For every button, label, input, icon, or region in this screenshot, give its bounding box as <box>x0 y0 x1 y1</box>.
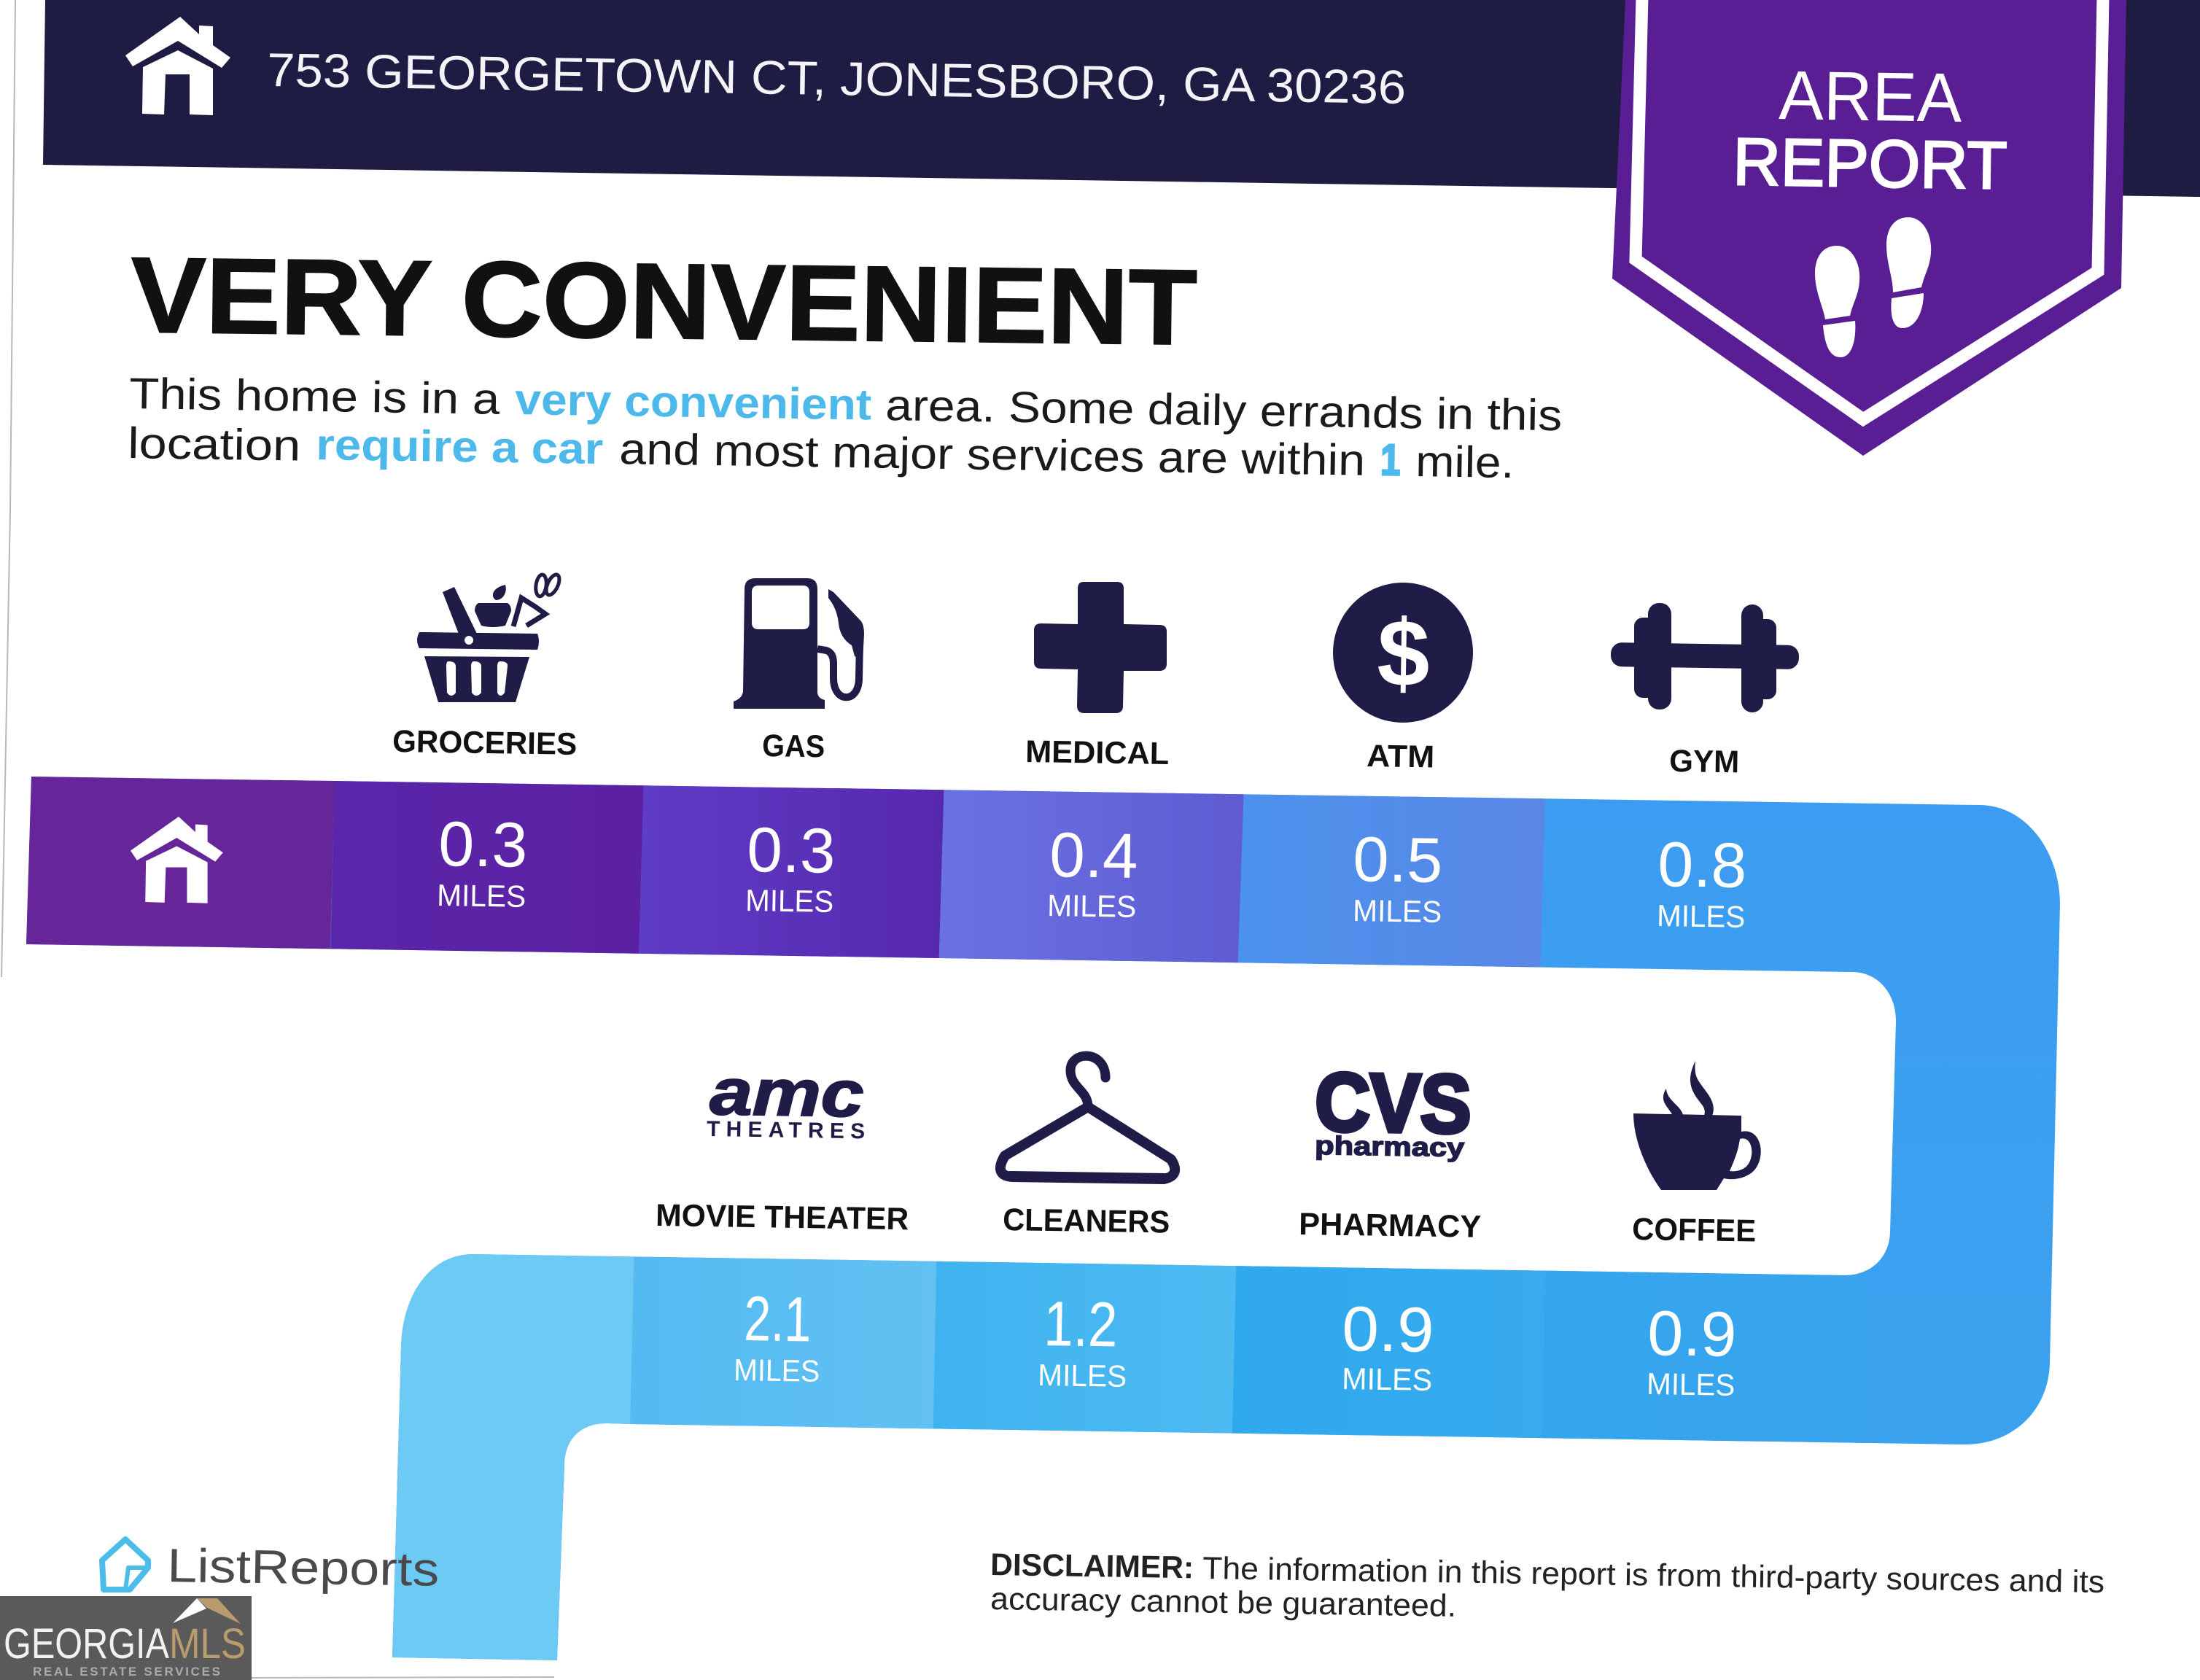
logo: georgia mls: GEORGIA <box>4 1620 169 1668</box>
intro paragraph: location <box>128 419 301 470</box>
logo: georgia mls <box>0 1596 252 1680</box>
intro paragraph: This home is in a <box>129 369 500 424</box>
logo: cvs pharmacy: pharmacy <box>1315 1130 1464 1162</box>
icon: footprints <box>1815 217 1931 357</box>
disclaimer: The information in this report is from third-party sources and its <box>1202 1551 2104 1600</box>
label: atm: ATM <box>1367 739 1435 774</box>
distance ribbon path <box>26 777 2060 1660</box>
disclaimer <box>990 1547 2104 1624</box>
intro paragraph: very convenient <box>515 375 872 429</box>
ribbon heading <box>1733 57 2007 203</box>
distance: cleaners 1.2 miles: 1.2 <box>1043 1288 1118 1361</box>
distance: coffee 0.9 miles <box>1647 1298 1737 1402</box>
distance: gym 0.8 miles <box>1657 829 1747 934</box>
intro paragraph: 1 <box>1380 435 1401 484</box>
intro paragraph: and most major services are within <box>619 424 1366 485</box>
logo: georgia mls: REAL ESTATE SERVICES <box>33 1665 220 1679</box>
icon: atm coin: $ <box>1377 599 1431 707</box>
icon: clothes hanger <box>1000 1056 1175 1179</box>
intro paragraph: require a car <box>316 420 604 473</box>
distance: medical 0.4 miles <box>1047 820 1138 924</box>
distance: movie theater 2.1 miles: MILES <box>734 1353 820 1388</box>
label: pharmacy: PHARMACY <box>1299 1207 1482 1245</box>
distance: coffee 0.9 miles: 0.9 <box>1647 1298 1737 1370</box>
label: groceries: GROCERIES <box>392 724 578 762</box>
distance: gym 0.8 miles: MILES <box>1657 898 1746 934</box>
distance: pharmacy 0.9 miles: MILES <box>1342 1361 1433 1397</box>
ribbon heading: REPORT <box>1733 125 2007 203</box>
ribbon heading: AREA <box>1779 57 1963 137</box>
logo: listreports: ListReports <box>167 1539 440 1596</box>
label: movie theater: MOVIE THEATER <box>656 1198 909 1237</box>
label: coffee: COFFEE <box>1632 1212 1757 1249</box>
distance: groceries 0.3 miles: MILES <box>437 878 526 914</box>
disclaimer: DISCLAIMER: <box>990 1547 1194 1585</box>
intro paragraph <box>128 369 1563 487</box>
distance: gas 0.3 miles: 0.3 <box>747 814 836 887</box>
distance: medical 0.4 miles: 0.4 <box>1049 820 1138 892</box>
distance: pharmacy 0.9 miles: 0.9 <box>1342 1294 1434 1366</box>
distance: cleaners 1.2 miles <box>1038 1288 1127 1393</box>
icon: medical cross <box>1034 582 1167 713</box>
address text: 753 GEORGETOWN CT, JONESBORO, GA 30236 <box>267 43 1407 114</box>
intro paragraph: mile. <box>1415 437 1515 487</box>
icon: groceries basket <box>417 572 562 702</box>
logo: georgia mls: MLS <box>169 1620 246 1668</box>
logo: cvs pharmacy: CVS <box>1315 1056 1472 1150</box>
ribbon badge: area report <box>1612 0 2126 456</box>
distance: groceries 0.3 miles <box>437 809 528 914</box>
label: medical: MEDICAL <box>1025 734 1170 771</box>
disclaimer: accuracy cannot be guaranteed. <box>990 1582 1457 1624</box>
label: gym: GYM <box>1669 744 1740 779</box>
header band <box>43 0 2200 197</box>
icon: bar house <box>131 817 223 903</box>
logo: amc theatres: amc <box>710 1056 864 1131</box>
intro paragraph: area. Some daily errands in this <box>885 381 1563 440</box>
icon: header house <box>125 17 230 115</box>
distance: cleaners 1.2 miles: MILES <box>1038 1358 1127 1393</box>
icon: gym dumbbell <box>1611 603 1799 712</box>
distance: gas 0.3 miles <box>745 814 836 919</box>
label: gas: GAS <box>762 728 825 764</box>
scanned page edge <box>1 0 554 1678</box>
icon: gas pump <box>734 578 864 709</box>
distance: gym 0.8 miles: 0.8 <box>1657 829 1747 901</box>
distance: coffee 0.9 miles: MILES <box>1647 1366 1735 1402</box>
distance: movie theater 2.1 miles <box>734 1283 820 1388</box>
distance: movie theater 2.1 miles: 2.1 <box>744 1283 812 1355</box>
distance: atm 0.5 miles <box>1353 824 1443 929</box>
distance: gas 0.3 miles: MILES <box>745 883 834 919</box>
distance: atm 0.5 miles: 0.5 <box>1353 824 1443 896</box>
distance: groceries 0.3 miles: 0.3 <box>438 809 528 881</box>
distance: medical 0.4 miles: MILES <box>1047 888 1137 924</box>
icon: coffee cup <box>1633 1061 1761 1190</box>
logo: amc theatres: THEATRES <box>707 1117 865 1143</box>
icon: atm coin <box>1333 583 1473 723</box>
title: VERY CONVENIENT <box>131 236 1197 368</box>
label: cleaners: CLEANERS <box>1003 1202 1170 1240</box>
distance: atm 0.5 miles: MILES <box>1353 893 1442 929</box>
distance: pharmacy 0.9 miles <box>1342 1294 1434 1397</box>
